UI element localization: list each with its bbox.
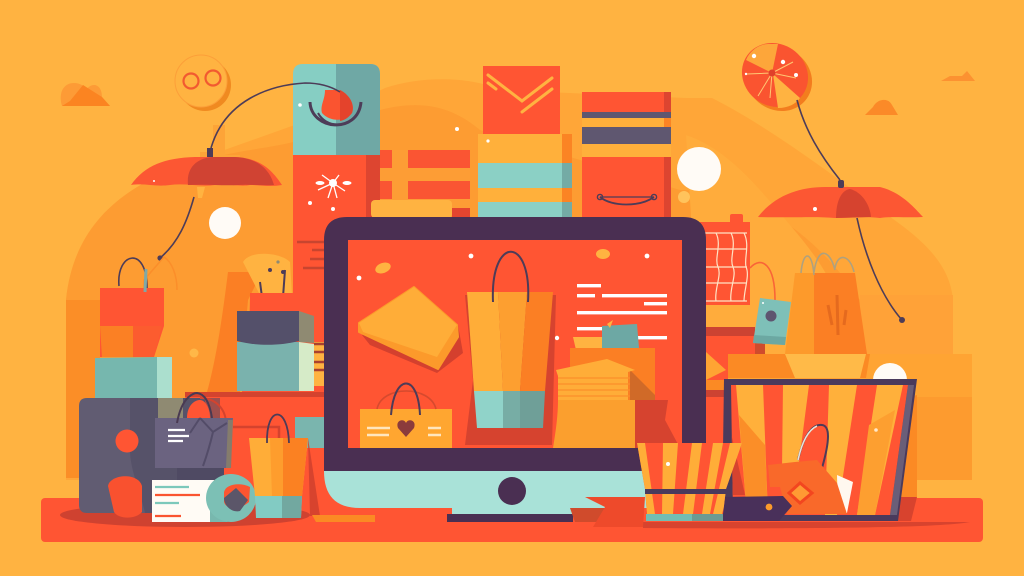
red column back with teal top (293, 64, 380, 355)
cord: right umbrella to weight (857, 218, 905, 323)
red cup (108, 476, 142, 518)
cord: balloon to right umbrella (797, 100, 840, 180)
white circle left (209, 207, 241, 239)
illustration: online shopping scene (41, 43, 983, 542)
teal box (95, 357, 172, 398)
floor (41, 497, 983, 542)
snowflake icon (318, 175, 345, 198)
teal ring (206, 474, 256, 522)
red fill right of monitor (706, 352, 728, 446)
middle grid block (371, 150, 470, 220)
bottom right block (727, 354, 972, 497)
cloud far right (941, 71, 975, 81)
laptop (722, 379, 917, 521)
right umbrella (758, 180, 923, 218)
dark tag (722, 496, 792, 521)
striped basket (637, 443, 742, 521)
cloud middle right (865, 100, 898, 115)
bag in laptop (768, 425, 853, 514)
right column with smile (582, 92, 671, 218)
big bag (465, 252, 556, 445)
dark box (79, 398, 220, 513)
orange floor strip (312, 515, 375, 522)
pale dot (678, 191, 690, 203)
small dots back (455, 127, 459, 131)
white circle right (677, 147, 721, 191)
back bag left (100, 257, 177, 357)
left umbrella (131, 148, 282, 198)
red pennant (585, 497, 645, 527)
left cords (160, 83, 340, 258)
grey bag (155, 393, 233, 480)
box dark top teal (237, 311, 326, 391)
monitor (324, 217, 706, 522)
cloud left (61, 83, 110, 106)
balloon (729, 30, 825, 124)
stacked parcels (553, 320, 680, 448)
envelope card (483, 66, 560, 134)
background arches (66, 79, 953, 480)
table red (185, 392, 455, 514)
white text lines (577, 284, 667, 339)
pentagon parcel (359, 287, 463, 373)
weight dot (157, 255, 163, 261)
red stand (706, 327, 765, 354)
screen contents (357, 249, 680, 448)
monitor button (498, 477, 526, 505)
right back bag (785, 253, 867, 354)
orange bag behind with handles (207, 254, 292, 392)
button face circle (175, 55, 231, 111)
teal orange bag (249, 414, 320, 518)
white card (152, 480, 214, 522)
red calendar (700, 214, 750, 305)
teal side block (295, 417, 325, 448)
red wire bag handle (750, 263, 775, 300)
striped column (478, 134, 572, 218)
red backing behind boxes (242, 293, 325, 392)
teal card tag (753, 298, 791, 345)
small bag (360, 383, 452, 448)
